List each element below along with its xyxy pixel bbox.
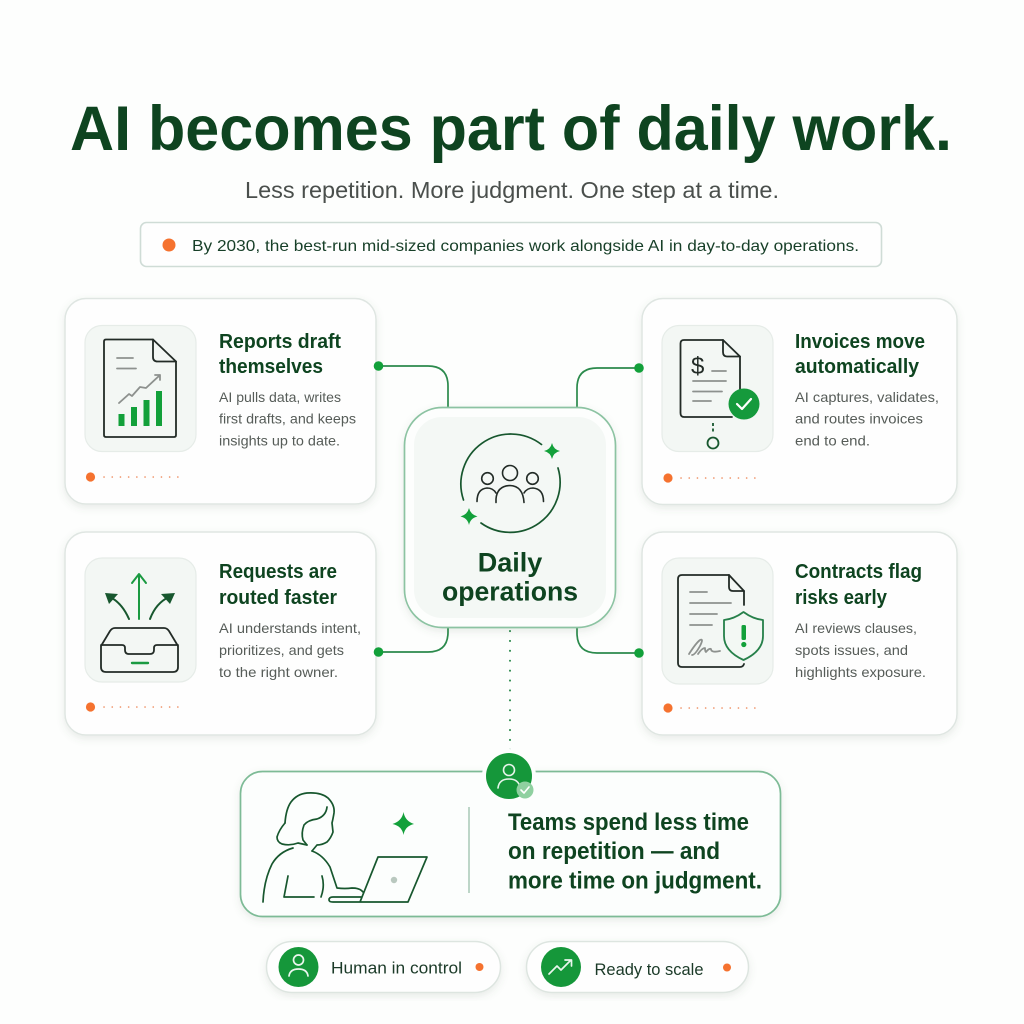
panel: contracts flag risks early <box>642 532 957 735</box>
panel: requests are routed faster <box>65 532 376 735</box>
label: daily operations: Daily <box>478 548 542 578</box>
icon: invoice with check <box>680 340 760 448</box>
panel: daily operations hub <box>404 408 616 628</box>
progress dots <box>86 702 182 712</box>
pill: human in control <box>266 942 500 992</box>
heading: requests are routed faster: Requests are <box>219 561 337 583</box>
title: AI becomes part of daily work. <box>70 94 952 164</box>
text: contracts description: highlights exposure. <box>795 664 926 680</box>
icon: contract with shield <box>678 575 763 667</box>
text: teams spend less time: on repetition — and <box>508 838 720 865</box>
icon: invoice with check: $ <box>691 353 704 380</box>
pill: ready to scale <box>526 942 748 992</box>
panel: teams outcome <box>240 772 780 916</box>
icon: person badge <box>482 749 536 803</box>
heading: reports draft themselves: Reports draft <box>219 331 341 353</box>
callout banner <box>140 222 882 266</box>
text: requests description: AI understands intent, <box>219 620 361 636</box>
text: requests description: to the right owner. <box>219 664 338 680</box>
icon: sparkle <box>392 812 414 835</box>
text: teams spend less time: more time on judgment. <box>508 868 762 894</box>
panel: invoices move automatically <box>642 298 957 504</box>
icon: team in circle with sparkles <box>460 434 560 532</box>
text: invoices description: AI captures, validates, <box>795 389 939 405</box>
pill: ready to scale: Ready to scale <box>594 960 704 979</box>
icon: report document with chart <box>104 340 176 437</box>
heading: contracts flag risks early: Contracts flag <box>795 561 922 583</box>
text: reports description: insights up to date. <box>219 432 340 448</box>
panel: reports draft themselves <box>65 298 376 504</box>
subtitle: Less repetition. More judgment. One step at a time. <box>245 177 779 203</box>
connectors from cards to center <box>374 361 644 753</box>
text: invoices description: end to end. <box>795 432 870 448</box>
icon: person at laptop <box>263 793 427 902</box>
text: contracts description: AI reviews clauses, <box>795 620 917 636</box>
pill: human in control: Human in control <box>331 958 462 978</box>
heading: reports draft themselves: themselves <box>219 356 323 378</box>
label: daily operations: operations <box>442 576 578 606</box>
heading: requests are routed faster: routed faster <box>219 587 337 609</box>
text: contracts description: spots issues, and <box>795 642 908 658</box>
heading: invoices move automatically: Invoices move <box>795 331 925 353</box>
progress dots <box>663 703 759 713</box>
text: reports description: first drafts, and keeps <box>219 410 356 426</box>
progress dots <box>663 473 759 483</box>
heading: invoices move automatically: automatically <box>795 356 920 378</box>
text: reports description: AI pulls data, writes <box>219 389 341 405</box>
heading: contracts flag risks early: risks early <box>795 587 888 609</box>
text: teams spend less time: Teams spend less time <box>508 809 749 836</box>
callout banner: By 2030, the best-run mid-sized companies work alongside AI in day-to-day operations. <box>192 238 859 255</box>
text: invoices description: and routes invoices <box>795 410 923 426</box>
progress dots <box>86 472 182 482</box>
icon: inbox tray with arrows <box>101 574 178 672</box>
text: requests description: prioritizes, and gets <box>219 642 344 658</box>
